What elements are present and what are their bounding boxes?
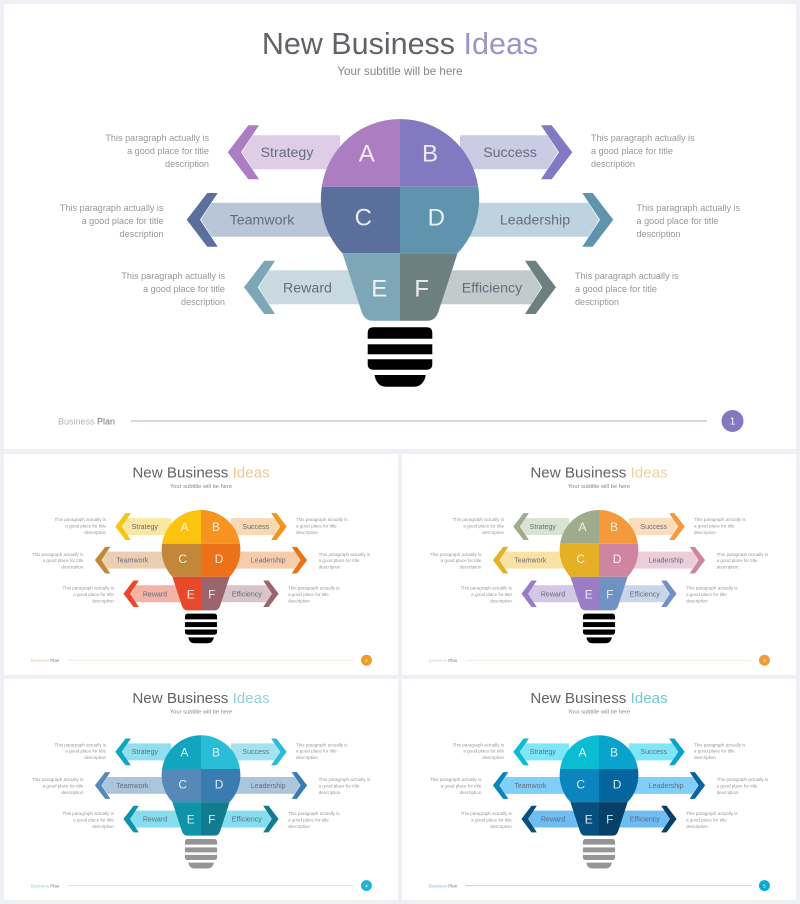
paragraph: Teamwork: description — [460, 790, 482, 795]
bulb: E — [585, 587, 593, 601]
subtitle: Your subtitle will be here — [337, 65, 463, 78]
paragraph: Teamwork: This paragraph actually is — [430, 777, 482, 782]
paragraph: Strategy: a good place for title — [65, 749, 106, 754]
footer — [429, 655, 770, 666]
slide content: blue — [429, 690, 770, 891]
paragraph: Teamwork: description — [120, 229, 164, 239]
bulb: D — [613, 552, 622, 566]
arrow: Leadership — [629, 772, 705, 799]
paragraph: Reward: description — [181, 297, 225, 307]
arrow: Leadership — [629, 547, 705, 574]
arrow: Success: Success — [483, 145, 537, 161]
subtitle: Your subtitle will be here — [170, 709, 232, 715]
arrow: Strategy: Strategy — [261, 145, 314, 161]
arrow: Efficiency: Efficiency — [232, 817, 262, 824]
panel: main purple slide — [4, 4, 796, 449]
paragraph: Leadership: This paragraph actually is — [717, 777, 769, 782]
paragraph: Reward: This paragraph actually is — [62, 811, 115, 816]
footer: Business Plan — [31, 658, 60, 663]
paragraph: Strategy: description — [482, 755, 504, 760]
paragraph: Leadership: a good place for title — [717, 784, 758, 789]
bulb: F — [414, 276, 429, 302]
paragraph: Efficiency: a good place for title — [288, 817, 329, 822]
paragraph: Teamwork: This paragraph actually is — [32, 777, 84, 782]
bulb: E — [585, 813, 593, 827]
arrow: Efficiency: Efficiency — [462, 280, 523, 296]
bulb: F — [208, 813, 215, 827]
paragraph: Teamwork: description — [62, 565, 84, 570]
paragraph: Teamwork: This paragraph actually is — [430, 552, 482, 557]
arrow: Teamwork: Teamwork — [514, 783, 547, 790]
paragraph: Efficiency: description — [288, 824, 310, 829]
bulb: B — [610, 745, 618, 759]
paragraph: Strategy: a good place for title — [463, 749, 504, 754]
arrow: Leadership — [231, 547, 307, 574]
bulb: B — [212, 745, 220, 759]
paragraph: Reward: description — [92, 824, 114, 829]
bulb: A — [180, 520, 188, 534]
paragraph: Teamwork: a good place for title — [43, 784, 84, 789]
arrow: Efficiency — [614, 806, 677, 832]
arrow: Efficiency — [216, 581, 279, 607]
arrow: Success: Success — [242, 524, 270, 531]
paragraph: Strategy: This paragraph actually is — [453, 742, 505, 747]
footer: 2 — [365, 658, 368, 664]
paragraph: Teamwork: description — [62, 790, 84, 795]
paragraph: Success: a good place for title — [296, 749, 337, 754]
arrow: Leadership: Leadership — [251, 557, 286, 564]
paragraph: Teamwork: description — [460, 565, 482, 570]
bulb — [162, 735, 240, 836]
subtitle: Your subtitle will be here — [568, 709, 630, 715]
paragraph: Strategy: This paragraph actually is — [453, 517, 505, 522]
paragraph: Reward: This paragraph actually is — [460, 811, 513, 816]
arrow: Strategy — [513, 738, 569, 765]
bulb: E — [187, 587, 195, 601]
footer: 4 — [365, 883, 368, 889]
bulb: F — [606, 813, 613, 827]
paragraph: Success: description — [296, 755, 318, 760]
paragraph: Leadership: description — [319, 790, 341, 795]
paragraph: Success: a good place for title — [296, 523, 337, 528]
paragraph: Efficiency: This paragraph actually is — [686, 586, 738, 591]
arrow: Reward: Reward — [283, 280, 332, 296]
title: New Business Ideas — [132, 465, 270, 482]
paragraph: Leadership: a good place for title — [636, 216, 718, 226]
arrow: Leadership — [460, 193, 613, 247]
arrow: Teamwork — [187, 193, 340, 247]
paragraph: Efficiency: description — [288, 599, 310, 604]
bulb base — [185, 614, 217, 643]
paragraph: Teamwork: This paragraph actually is — [32, 552, 84, 557]
arrow: Reward — [123, 806, 186, 832]
paragraph: Reward: This paragraph actually is — [460, 586, 513, 591]
arrow: Strategy — [115, 513, 171, 540]
arrow: Strategy: Strategy — [132, 749, 158, 756]
bulb — [162, 510, 240, 610]
arrow: Reward — [123, 581, 186, 607]
bulb: C — [576, 777, 585, 791]
bulb base — [583, 614, 615, 643]
subtitle: Your subtitle will be here — [170, 484, 232, 490]
paragraph: Reward: description — [490, 824, 512, 829]
paragraph: Reward: a good place for title — [471, 592, 512, 597]
paragraph: Leadership: description — [319, 565, 341, 570]
paragraph: Reward: This paragraph actually is — [62, 586, 115, 591]
arrow: Teamwork — [493, 547, 569, 574]
arrow: Success — [231, 738, 287, 765]
bulb base — [185, 839, 217, 868]
bulb — [560, 510, 638, 610]
paragraph: Strategy: description — [84, 755, 106, 760]
paragraph: Leadership: This paragraph actually is — [319, 552, 371, 557]
arrow: Reward: Reward — [143, 817, 167, 824]
bulb: D — [215, 777, 224, 791]
bulb: D — [613, 777, 622, 791]
bulb: E — [371, 276, 387, 302]
paragraph: Reward: description — [92, 599, 114, 604]
arrow: Leadership: Leadership — [251, 783, 286, 790]
footer: 5 — [763, 883, 766, 889]
arrow: Success — [629, 738, 685, 765]
paragraph: Leadership: This paragraph actually is — [636, 203, 741, 213]
arrow: Efficiency: Efficiency — [630, 591, 660, 598]
paragraph: Leadership: a good place for title — [319, 558, 360, 563]
footer: 3 — [763, 658, 766, 664]
arrow: Strategy — [115, 738, 171, 765]
arrow: Success — [231, 513, 287, 540]
paragraph: Reward: a good place for title — [143, 284, 225, 294]
paragraph: Success: This paragraph actually is — [694, 517, 746, 522]
paragraph: Leadership: description — [636, 229, 680, 239]
paragraph: Teamwork: This paragraph actually is — [60, 203, 164, 213]
arrow: Strategy — [513, 513, 569, 540]
bulb: B — [422, 140, 438, 168]
arrow: Efficiency: Efficiency — [232, 591, 262, 598]
paragraph: Efficiency: description — [686, 824, 708, 829]
panel: teal slide — [4, 679, 398, 900]
paragraph: Success: This paragraph actually is — [591, 133, 695, 143]
bulb: A — [578, 520, 586, 534]
arrow: Reward: Reward — [541, 591, 565, 598]
arrow: Teamwork: Teamwork — [116, 783, 149, 790]
paragraph: Strategy: This paragraph actually is — [105, 133, 209, 143]
title: New Business Ideas — [530, 690, 668, 707]
paragraph: Reward: a good place for title — [73, 817, 114, 822]
paragraph: Reward: description — [490, 599, 512, 604]
arrow: Teamwork: Teamwork — [230, 212, 295, 228]
paragraph: Teamwork: a good place for title — [82, 216, 164, 226]
bulb: C — [178, 777, 187, 791]
paragraph: Leadership: This paragraph actually is — [319, 777, 371, 782]
arrow: Teamwork — [493, 772, 569, 799]
bulb: B — [610, 520, 618, 534]
paragraph: Teamwork: a good place for title — [43, 558, 84, 563]
paragraph: Leadership: This paragraph actually is — [717, 552, 769, 557]
paragraph: Teamwork: a good place for title — [441, 784, 482, 789]
paragraph: Teamwork: a good place for title — [441, 558, 482, 563]
title: New Business Ideas — [530, 465, 668, 482]
arrow: Success: Success — [640, 524, 668, 531]
paragraph: Efficiency: a good place for title — [288, 592, 329, 597]
paragraph: Success: This paragraph actually is — [296, 742, 348, 747]
bulb: A — [180, 745, 188, 759]
paragraph: Efficiency: a good place for title — [686, 817, 727, 822]
slide content: teal — [31, 690, 372, 891]
arrow: Leadership: Leadership — [649, 783, 684, 790]
paragraph: Reward: a good place for title — [73, 592, 114, 597]
paragraph: Strategy: a good place for title — [463, 523, 504, 528]
paragraph: Strategy: This paragraph actually is — [55, 742, 107, 747]
arrow: Reward: Reward — [541, 817, 565, 824]
paragraph: Strategy: a good place for title — [65, 523, 106, 528]
arrow: Teamwork: Teamwork — [116, 557, 149, 564]
title: New Business Ideas — [262, 27, 538, 61]
paragraph: Leadership: description — [717, 565, 739, 570]
paragraph: Success: description — [591, 159, 635, 169]
paragraph: Success: This paragraph actually is — [296, 517, 348, 522]
arrow: Success: Success — [640, 749, 668, 756]
arrow: Leadership — [231, 772, 307, 799]
arrow: Success: Success — [242, 749, 270, 756]
bulb base — [368, 327, 432, 387]
arrow: Strategy — [228, 125, 340, 179]
slide content: multicolour — [429, 465, 770, 666]
bulb — [560, 735, 638, 836]
bulb base — [583, 839, 615, 868]
paragraph: Efficiency: a good place for title — [686, 592, 727, 597]
paragraph: Efficiency: This paragraph actually is — [288, 586, 340, 591]
bulb: A — [359, 140, 375, 168]
footer: 1 — [730, 416, 736, 428]
paragraph: Efficiency: description — [686, 599, 708, 604]
panel: multicolour slide — [402, 454, 796, 675]
paragraph: Leadership: a good place for title — [717, 558, 758, 563]
paragraph: Strategy: description — [84, 530, 106, 535]
footer — [58, 410, 744, 432]
paragraph: Success: description — [694, 755, 716, 760]
paragraph: Efficiency: description — [575, 297, 619, 307]
bulb: C — [178, 552, 187, 566]
bulb: D — [428, 204, 445, 232]
arrow: Strategy: Strategy — [132, 524, 158, 531]
arrow: Reward — [244, 261, 370, 314]
bulb: E — [187, 813, 195, 827]
bulb — [321, 119, 479, 321]
footer: Business Plan — [31, 883, 60, 888]
paragraph: Strategy: description — [482, 530, 504, 535]
arrow: Leadership: Leadership — [500, 212, 570, 228]
bulb: C — [355, 204, 372, 232]
bulb: F — [606, 587, 613, 601]
paragraph: Leadership: description — [717, 790, 739, 795]
arrow: Efficiency — [614, 581, 677, 607]
arrow: Reward — [521, 581, 584, 607]
paragraph: Leadership: a good place for title — [319, 784, 360, 789]
paragraph: Success: a good place for title — [591, 146, 673, 156]
arrow: Reward — [521, 806, 584, 832]
arrow: Teamwork: Teamwork — [514, 557, 547, 564]
title: New Business Ideas — [132, 690, 270, 707]
arrow: Efficiency: Efficiency — [630, 817, 660, 824]
footer — [429, 880, 770, 891]
subtitle: Your subtitle will be here — [568, 484, 630, 490]
paragraph: Reward: a good place for title — [471, 817, 512, 822]
arrow: Teamwork — [95, 772, 171, 799]
arrow: Leadership: Leadership — [649, 557, 684, 564]
footer: Business Plan — [58, 416, 115, 426]
arrow: Teamwork — [95, 547, 171, 574]
arrow: Success — [629, 513, 685, 540]
panel: blue slide — [402, 679, 796, 900]
bulb: B — [212, 520, 220, 534]
arrow: Strategy: Strategy — [530, 749, 556, 756]
paragraph: Strategy: a good place for title — [127, 146, 209, 156]
footer: Business Plan — [429, 658, 458, 663]
arrow: Efficiency — [216, 806, 279, 832]
paragraph: Success: a good place for title — [694, 749, 735, 754]
paragraph: Success: description — [694, 530, 716, 535]
bulb: F — [208, 587, 215, 601]
paragraph: Efficiency: This paragraph actually is — [686, 811, 738, 816]
paragraph: Success: a good place for title — [694, 523, 735, 528]
footer — [31, 655, 372, 666]
paragraph: Reward: This paragraph actually is — [121, 271, 225, 281]
footer: Business Plan — [429, 883, 458, 888]
paragraph: Success: This paragraph actually is — [694, 742, 746, 747]
bulb: A — [578, 745, 586, 759]
arrow: Strategy: Strategy — [530, 524, 556, 531]
arrow: Success — [460, 125, 572, 179]
bulb: C — [576, 552, 585, 566]
paragraph: Strategy: description — [165, 159, 209, 169]
slide content: orange — [31, 465, 372, 666]
paragraph: Efficiency: a good place for title — [575, 284, 657, 294]
paragraph: Strategy: This paragraph actually is — [55, 517, 107, 522]
bulb: D — [215, 552, 224, 566]
paragraph: Efficiency: This paragraph actually is — [288, 811, 340, 816]
arrow: Efficiency — [430, 261, 556, 314]
footer — [31, 880, 372, 891]
paragraph: Efficiency: This paragraph actually is — [575, 271, 679, 281]
arrow: Reward: Reward — [143, 591, 167, 598]
panel: orange slide — [4, 454, 398, 675]
paragraph: Success: description — [296, 530, 318, 535]
